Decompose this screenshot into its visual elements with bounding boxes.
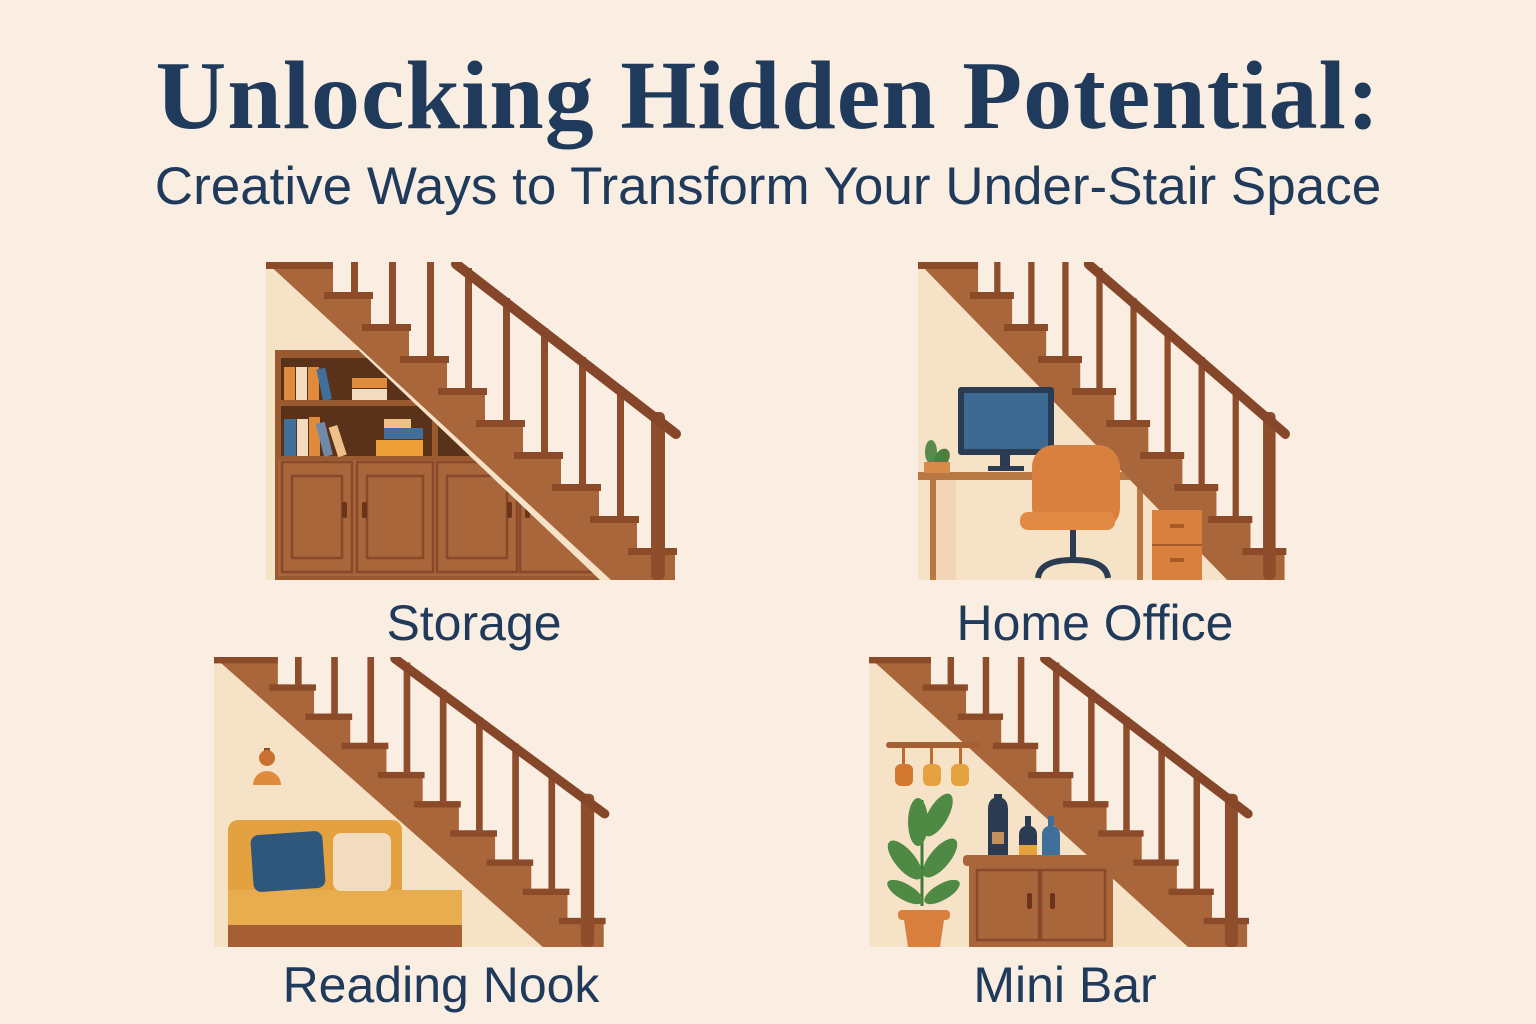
subtitle: Creative Ways to Transform Your Under-Stair Space (155, 157, 1381, 216)
cabinet (963, 855, 1119, 947)
scene: mini bar (869, 657, 1249, 947)
plant in pot (882, 789, 963, 947)
wall lamp (253, 748, 281, 785)
scene: storage (266, 262, 677, 580)
bottles (988, 794, 1060, 855)
sofa (228, 820, 462, 947)
plant (924, 440, 953, 473)
books (284, 367, 423, 457)
desk (918, 472, 1158, 580)
glass rack (886, 742, 980, 786)
file cabinet (1152, 510, 1202, 580)
label: storage: Storage (386, 595, 562, 651)
chair (1020, 445, 1120, 578)
label: mini bar: Mini Bar (973, 957, 1157, 1013)
label: reading nook: Reading Nook (283, 957, 599, 1013)
monitor (958, 387, 1054, 471)
scene: reading nook (214, 657, 606, 947)
illustrations (214, 262, 1290, 947)
scene: home office (918, 262, 1286, 580)
cabinet with bookshelves (275, 350, 605, 580)
label: home office: Home Office (957, 595, 1233, 651)
title: Unlocking Hidden Potential: (156, 42, 1380, 150)
